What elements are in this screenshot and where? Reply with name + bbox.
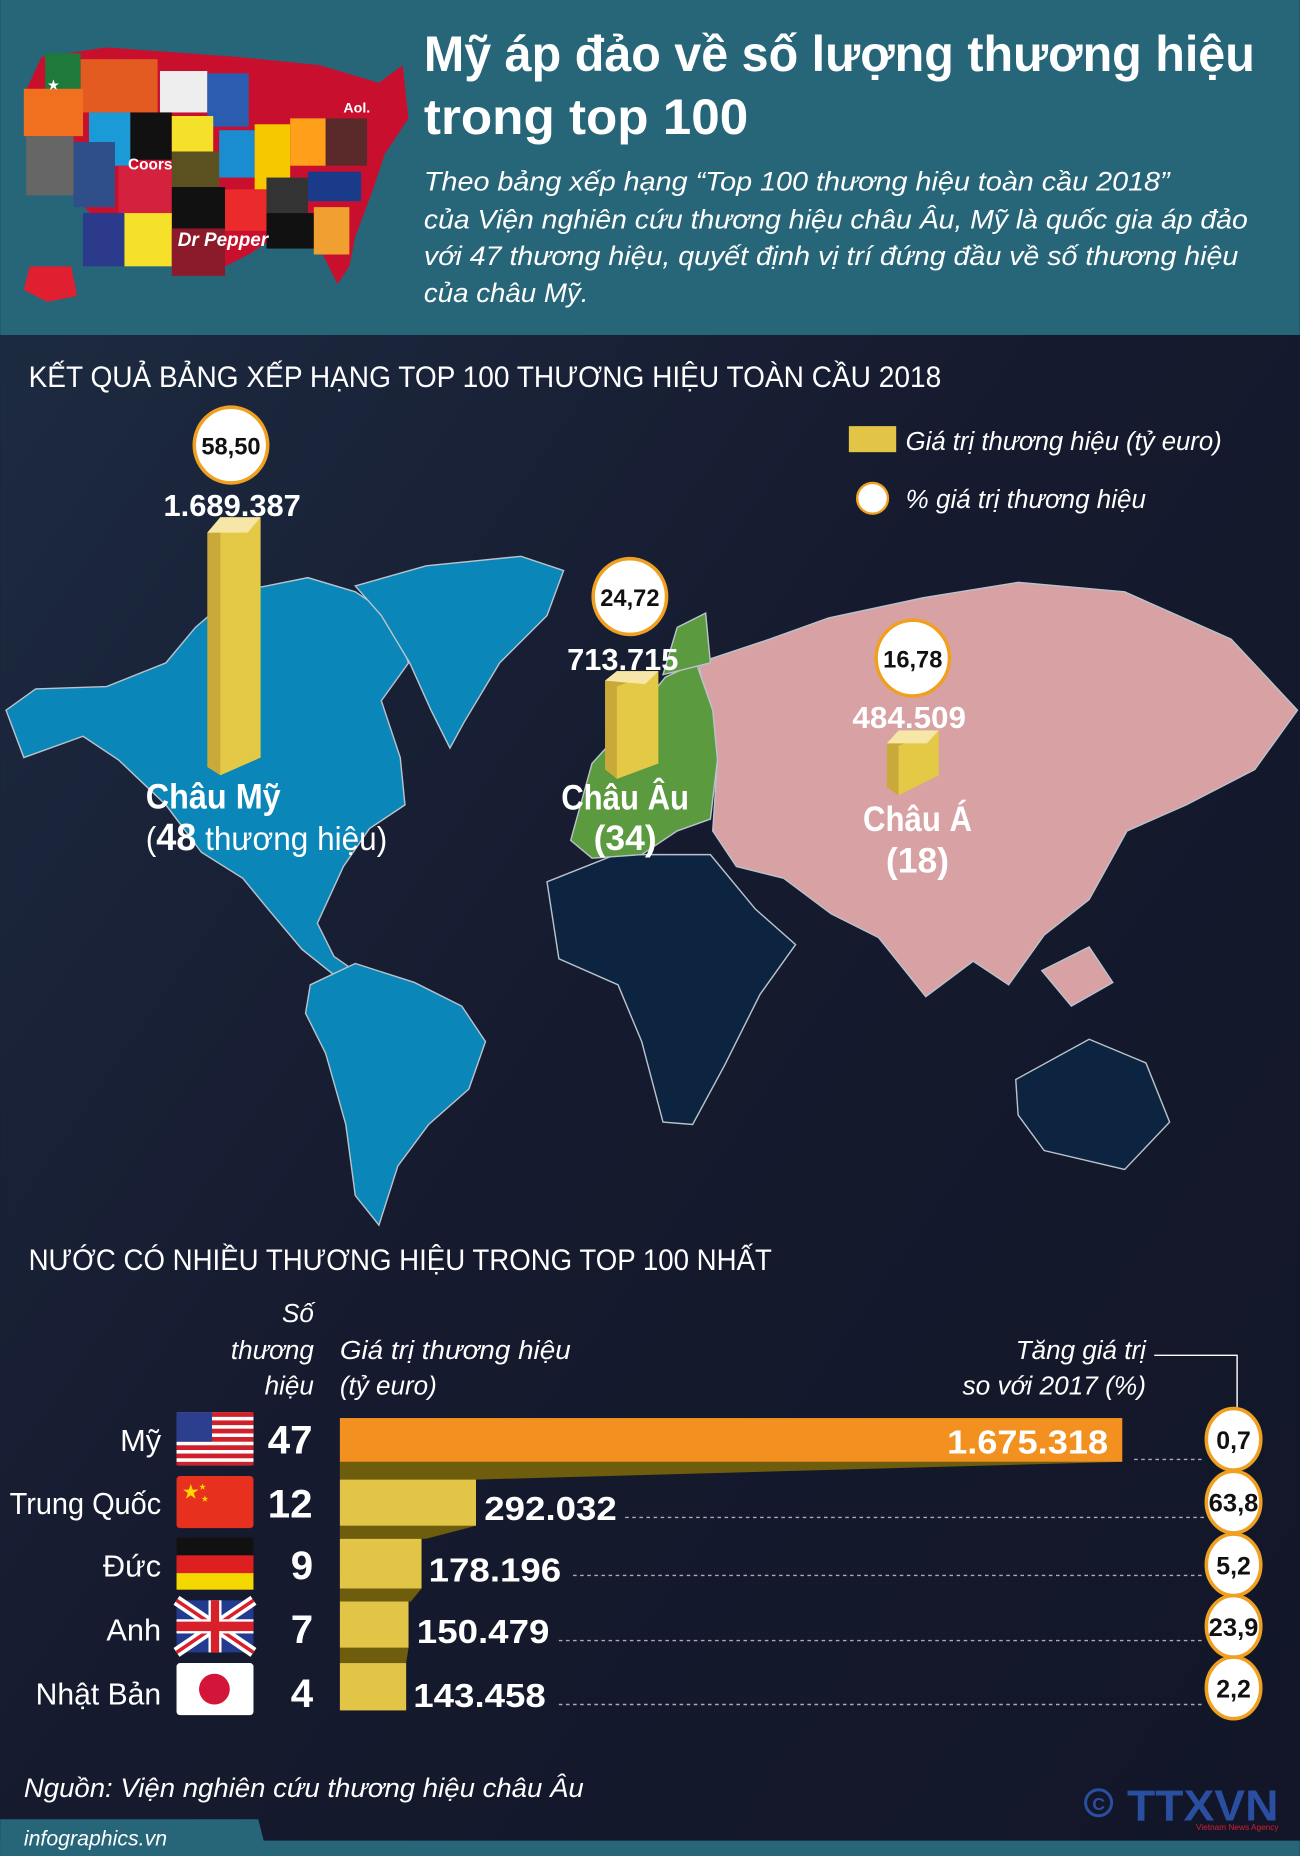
- intro text: [424, 166, 1248, 308]
- bar: USA: 1.675.318: [947, 1425, 1108, 1462]
- icon: US brand map: [24, 47, 409, 302]
- world map: [6, 556, 1297, 1225]
- bar: Japan: 143.458: [413, 1678, 546, 1715]
- label: Europe: Châu Âu: [561, 778, 689, 818]
- map: Africa: [547, 855, 796, 1124]
- footer: infographics.vn: [24, 1826, 167, 1850]
- brand counts: 7: [291, 1607, 313, 1652]
- bar: UK: 150.479: [417, 1614, 549, 1651]
- section heading: countries: NƯỚC CÓ NHIỀU THƯƠNG HIỆU TRONG TOP 100 NHẤT: [29, 1243, 772, 1277]
- growth circles: [1206, 1409, 1261, 1719]
- label: Asia: [863, 799, 972, 880]
- column headers: thương: [231, 1335, 314, 1365]
- bar chart: countries: [340, 1418, 1205, 1715]
- column headers: Tăng giá trị: [1016, 1335, 1147, 1365]
- column headers: (tỷ euro): [340, 1370, 437, 1400]
- intro text: của châu Mỹ.: [424, 277, 588, 308]
- country names: Nhật Bản: [36, 1676, 161, 1711]
- column headers: so với 2017 (%): [962, 1370, 1146, 1400]
- icon: US brand map: ★: [48, 78, 60, 92]
- icon: Japan flag: [177, 1663, 253, 1715]
- logo: TTXVN: Vietnam News Agency: [1196, 1823, 1279, 1832]
- growth circles: 63,8: [1209, 1491, 1259, 1518]
- logo: TTXVN: C: [1092, 1794, 1105, 1814]
- bar: Europe: 713.715: [567, 642, 678, 677]
- bar: Germany: [340, 1539, 561, 1589]
- brand counts: 4: [291, 1671, 314, 1716]
- icon: US brand map: Coors: [128, 156, 172, 173]
- country names: Trung Quốc: [10, 1486, 161, 1521]
- map: Australia: [1016, 1039, 1170, 1169]
- icon: China flag: ★: [201, 1495, 208, 1503]
- label: Asia: (18): [886, 840, 949, 880]
- source: Nguồn: Viện nghiên cứu thương hiệu châu Âu: [24, 1772, 584, 1803]
- label: Americas: [146, 776, 387, 859]
- icon: US flag: [177, 1412, 253, 1465]
- brand counts: [268, 1418, 314, 1716]
- label: Asia: Châu Á: [863, 799, 972, 839]
- bar: Asia: 484.509: [852, 700, 966, 735]
- intro text: Theo bảng xếp hạng “Top 100 thương hiệu toàn cầu 2018”: [424, 166, 1172, 197]
- bar: Asia: [852, 620, 966, 795]
- bar: Americas: [164, 407, 301, 775]
- legend: [849, 426, 1222, 514]
- logo: TTXVN: TTXVN: [1127, 1781, 1279, 1830]
- icon: China flag: ★: [182, 1482, 199, 1501]
- column headers: Số: [282, 1298, 316, 1328]
- label: Americas: Châu Mỹ: [146, 776, 281, 816]
- growth circles: 5,2: [1216, 1553, 1251, 1580]
- intro text: của Viện nghiên cứu thương hiệu châu Âu, Mỹ là quốc gia áp đảo: [424, 203, 1248, 234]
- column headers: [231, 1298, 1237, 1409]
- growth circles: 0,7: [1216, 1428, 1251, 1455]
- icon: Germany flag: [177, 1538, 253, 1590]
- brand counts: 12: [268, 1481, 313, 1526]
- label: Europe: (34): [594, 818, 657, 858]
- map: Europe: [571, 613, 717, 858]
- brand counts: 47: [268, 1418, 313, 1463]
- intro text: với 47 thương hiệu, quyết định vị trí đứng đầu về số thương hiệu: [424, 240, 1238, 271]
- bar: Americas: 1.689.387: [164, 488, 301, 523]
- label: Europe: [561, 778, 689, 858]
- bar: Europe: 24,72: [600, 586, 659, 612]
- title: trong top 100: [424, 89, 748, 145]
- title: Mỹ áp đảo về số lượng thương hiệu: [424, 26, 1255, 82]
- bar: USA: [340, 1418, 1122, 1462]
- bar: Europe: [567, 559, 678, 779]
- section heading: ranking results: KẾT QUẢ BẢNG XẾP HẠNG TOP 100 THƯƠNG HIỆU TOÀN CẦU 2018: [29, 360, 941, 394]
- legend: Giá trị thương hiệu (tỷ euro): [906, 426, 1222, 456]
- header panel: [0, 0, 1300, 335]
- growth circles: 2,2: [1216, 1676, 1251, 1703]
- icon: US brand map: Aol.: [343, 100, 370, 116]
- footer: [0, 1819, 1300, 1856]
- legend: % giá trị thương hiệu: [906, 484, 1146, 514]
- bar: Asia: 16,78: [883, 648, 942, 674]
- icon: China flag: [177, 1476, 253, 1528]
- country names: Đức: [103, 1549, 161, 1584]
- country names: [10, 1423, 162, 1711]
- icon: US brand map: Dr Pepper: [178, 230, 270, 251]
- column headers: Giá trị thương hiệu: [340, 1335, 571, 1365]
- growth circles: 23,9: [1209, 1615, 1258, 1642]
- map: Americas: [6, 556, 564, 1225]
- icon: UK flag: [177, 1600, 253, 1652]
- bar: Americas: 58,50: [201, 435, 261, 461]
- bar: China: 292.032: [484, 1491, 617, 1528]
- label: Americas: (48 thương hiệu): [146, 817, 387, 859]
- country names: Mỹ: [120, 1423, 162, 1458]
- brand counts: 9: [291, 1543, 313, 1588]
- map: Asia: [699, 582, 1297, 997]
- bar: Germany: 178.196: [429, 1552, 561, 1589]
- bar: UK: [340, 1602, 549, 1651]
- icon: China flag: ★: [199, 1483, 206, 1491]
- title: [424, 26, 1255, 145]
- column headers: hiệu: [265, 1370, 314, 1400]
- bar: China: [340, 1480, 617, 1528]
- country names: Anh: [106, 1613, 161, 1648]
- bar: Japan: [340, 1663, 546, 1715]
